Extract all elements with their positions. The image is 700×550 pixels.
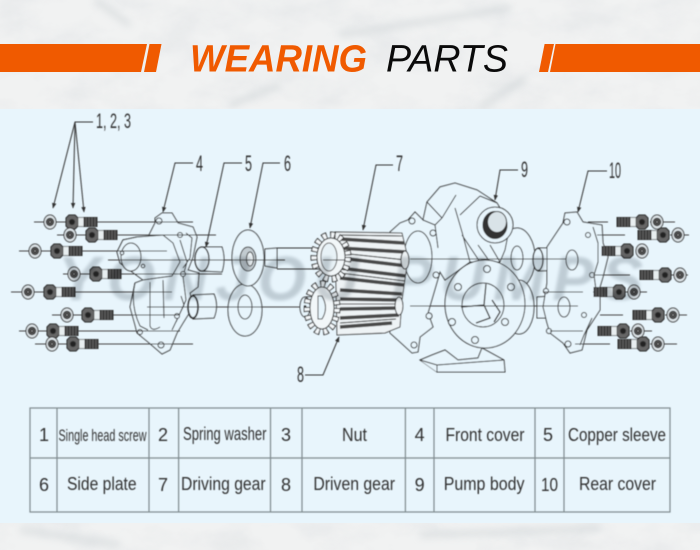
right bolt row 7 [550, 324, 652, 338]
callout 10 [578, 158, 621, 212]
left bolt row 6 [52, 308, 180, 322]
right bolt row 2 [597, 228, 689, 242]
right bolt row 6 [600, 308, 687, 322]
table grid [30, 408, 670, 512]
left bolt row 3 [19, 244, 167, 258]
table row 1: Spring washer [183, 424, 267, 444]
callout 7 [363, 151, 403, 230]
table row 2: 7 [158, 475, 168, 495]
table row 2: 9 [415, 475, 425, 495]
light blue panel [0, 109, 700, 523]
table row 2: 10 [541, 475, 558, 495]
header band: left orange bars [0, 44, 162, 72]
right bolt row 1 [588, 215, 675, 229]
gear teeth body [335, 232, 409, 335]
watermark: YONJOU PUMPS [58, 245, 643, 314]
part 4: front cover [117, 213, 199, 354]
table row 1: Copper sleeve [568, 425, 666, 445]
table row 2: Rear cover [579, 474, 656, 494]
part 10: rear cover [543, 212, 608, 353]
table row 1: Nut [342, 425, 367, 445]
left bolt row 5 [11, 285, 172, 299]
table row 1: 2 [158, 425, 168, 445]
table row 1: Single head screw [58, 426, 147, 445]
table row 2: Driving gear [181, 474, 266, 494]
left bolt row 8 [35, 337, 193, 351]
exploded pump diagram [11, 110, 689, 387]
callout 8 [297, 337, 339, 387]
right bolt row 3 [602, 244, 648, 258]
table row 1: Front cover [446, 425, 525, 445]
part 5: lower copper sleeve [188, 294, 216, 319]
part 7: driving gear shaft [265, 248, 332, 269]
callout 5 [206, 151, 252, 247]
callout 6: 6 [284, 151, 291, 176]
table row 2: Driven gear [313, 474, 395, 494]
callout 6 [250, 151, 291, 228]
part 6: side plates [228, 230, 264, 336]
right bolt row 5 [543, 285, 647, 299]
left bolt row 4 [63, 267, 222, 281]
callout 1, 2, 3: 1, 2, 3 [96, 110, 131, 133]
callout 4 [163, 151, 203, 212]
table row 2 [39, 474, 656, 495]
table row 2: 6 [39, 475, 49, 495]
table row 1: 4 [415, 425, 425, 445]
table row 1: 3 [281, 425, 291, 445]
rear sleeves [533, 248, 564, 318]
title: WEARING [190, 38, 367, 80]
table row 1: 1 [39, 425, 49, 445]
table row 1 [39, 424, 666, 445]
title [190, 38, 508, 80]
callout 8: 8 [297, 362, 304, 387]
table row 2: Side plate [67, 474, 137, 494]
part 9: pump body [390, 183, 535, 372]
parts table [30, 408, 670, 512]
table row 1: 5 [543, 425, 553, 445]
callout 7: 7 [396, 151, 403, 176]
left bolt row 2 [57, 228, 216, 242]
callout 1, 2, 3 [53, 110, 131, 212]
header band: right orange bars [539, 44, 700, 72]
left bolt row 7 [19, 324, 180, 338]
callout 9 [495, 157, 528, 200]
right bolt row 4 [593, 268, 688, 282]
exploded pump diagram: 10 [609, 158, 621, 183]
left bolt row 1 [34, 215, 193, 229]
part 7: driving gear face [314, 235, 348, 279]
right bolt row 8 [575, 337, 677, 351]
table row 2: 8 [281, 475, 291, 495]
callout 5: 5 [245, 151, 252, 176]
part 8: driven gear face [307, 284, 337, 332]
table row 2: Pump body [444, 474, 524, 494]
callout 9: 9 [521, 157, 528, 182]
title: PARTS [386, 38, 508, 80]
callout 4: 4 [196, 151, 203, 176]
part 8: driven gear shaft [300, 296, 320, 319]
axis lines [108, 259, 578, 307]
part 5: upper copper sleeve [195, 247, 224, 272]
